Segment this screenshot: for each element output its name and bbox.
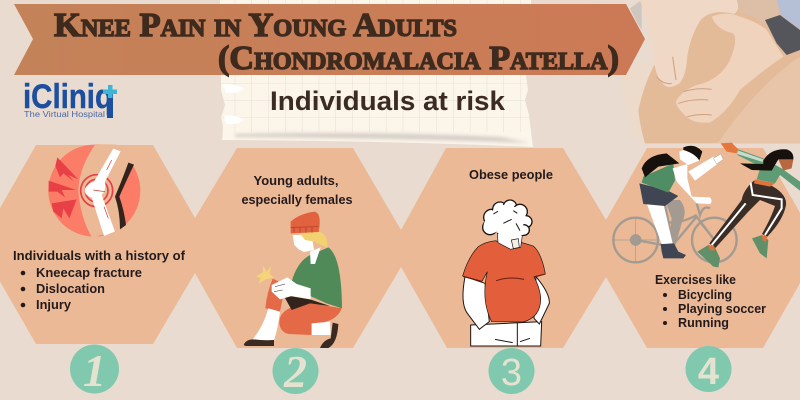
panel 3: obese people (463, 168, 553, 394)
panel 4: exercises (613, 143, 800, 393)
text: history list: Individuals with a history of (13, 249, 186, 263)
icon: injured knee (48, 144, 140, 238)
logo: iCliniq: iCliniq (23, 78, 113, 116)
text: young adults: especially females (242, 193, 353, 207)
logo: iCliniq: The Virtual Hospital (24, 110, 105, 119)
text: exercises list: Exercises like (655, 273, 736, 287)
number badge 3 (488, 348, 534, 394)
text: history list (13, 249, 186, 312)
text: exercises list (655, 273, 766, 330)
number badge 2: 2 (283, 346, 307, 397)
number badge 3: 3 (501, 352, 522, 394)
number badge 2 (272, 346, 318, 397)
text: history list: Dislocation (36, 282, 105, 296)
text: history list: Kneecap fracture (36, 266, 142, 280)
hexagon band (0, 145, 800, 348)
text: exercises list: Running (678, 316, 729, 330)
panel 2: young adults (242, 174, 353, 397)
far leg (665, 200, 685, 247)
text: exercises list: Bicycling (678, 288, 732, 302)
title ribbon (14, 4, 645, 77)
text: history list: Injury (36, 298, 71, 312)
title text line 2: (Chondromalacia Patella) (218, 40, 619, 77)
illustration: cyclist and runner (613, 143, 800, 267)
cyclist (639, 146, 723, 258)
runner (697, 143, 800, 267)
text: young adults: Young adults, (254, 174, 338, 188)
number badge 1 (70, 344, 119, 396)
number badge 1: 1 (83, 345, 106, 396)
illustration: obese person (463, 200, 549, 346)
title text: Knee Pain in Young Adults (54, 7, 457, 44)
number badge 4: 4 (698, 351, 719, 393)
heading: individuals at risk: Individuals at risk (270, 86, 506, 116)
paper note: torn grid paper behind the title (220, 0, 533, 147)
text: obese people: Obese people (469, 168, 553, 182)
number badge 4 (686, 346, 732, 393)
illustration: woman holding knee (244, 212, 342, 348)
panel 1: history of injury (13, 144, 186, 396)
text: young adults (242, 174, 353, 207)
bicycle (613, 203, 737, 262)
photo: hands holding knee (620, 0, 800, 143)
text: exercises list: Playing soccer (678, 302, 766, 316)
